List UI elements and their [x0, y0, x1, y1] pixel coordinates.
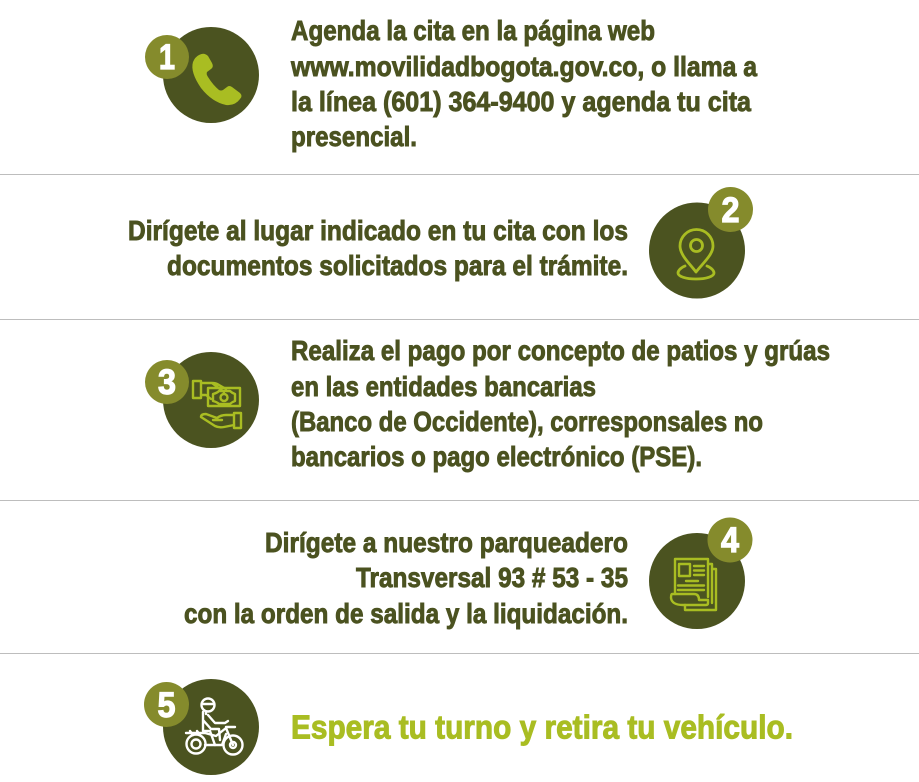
step 5 text: Espera tu turno y retira tu vehículo. [291, 708, 793, 746]
step 5 number badge: 5 [158, 686, 176, 725]
step 3 text: bancarios o pago electrónico (PSE). [291, 441, 702, 472]
step 1 text: presencial. [291, 121, 417, 152]
step 3 panel [145, 335, 830, 472]
step 4 text: Dirígete a nuestro parqueadero [265, 527, 628, 558]
step 3 text [291, 335, 830, 472]
step 2 number badge [708, 187, 753, 232]
step 4 text: con la orden de salida y la liquidación. [184, 598, 628, 629]
step 2 text [128, 215, 628, 281]
step 1 panel [145, 15, 757, 152]
step 4 number badge: 4 [721, 521, 739, 560]
step 3 number badge: 3 [158, 363, 176, 402]
step 4 text [184, 527, 628, 629]
step 4 number badge [708, 518, 752, 562]
icon: motorcycle rider [186, 698, 242, 754]
step 5 icon circle [163, 679, 259, 775]
step 1 icon circle [163, 27, 259, 123]
step 1 text: www.movilidadbogota.gov.co, o llama a [290, 51, 757, 82]
step 1 text [290, 15, 757, 152]
icon: phone [192, 54, 242, 105]
step 2 text: Dirígete al lugar indicado en tu cita con los [128, 215, 628, 246]
step 2 number badge: 2 [722, 191, 740, 230]
step 4 icon circle [649, 533, 745, 629]
step 1 text: la línea (601) 364-9400 y agenda tu cita [291, 86, 751, 117]
step 5 number badge [144, 682, 189, 727]
step 5 panel [144, 679, 793, 775]
step 3 text: (Banco de Occidente), corresponsales no [291, 406, 763, 437]
step 1 text: Agenda la cita en la página web [291, 15, 655, 46]
step 2 icon circle [649, 202, 745, 298]
step 3 text: Realiza el pago por concepto de patios y grúas [291, 335, 830, 366]
step 1 number badge [145, 35, 189, 79]
step 2 panel [128, 187, 753, 298]
icon: hands exchanging money [193, 381, 241, 428]
step 3 number badge [145, 360, 189, 404]
step 4 text: Transversal 93 # 53 - 35 [356, 562, 628, 593]
step 3 icon circle [163, 352, 259, 448]
icon: location pin [678, 230, 714, 279]
step 2 text: documentos solicitados para el trámite. [167, 250, 628, 281]
step 3 text: en las entidades bancarias [291, 371, 596, 402]
step 1 number badge: 1 [159, 38, 175, 77]
step 4 panel [184, 518, 752, 629]
icon: documents [671, 559, 716, 610]
